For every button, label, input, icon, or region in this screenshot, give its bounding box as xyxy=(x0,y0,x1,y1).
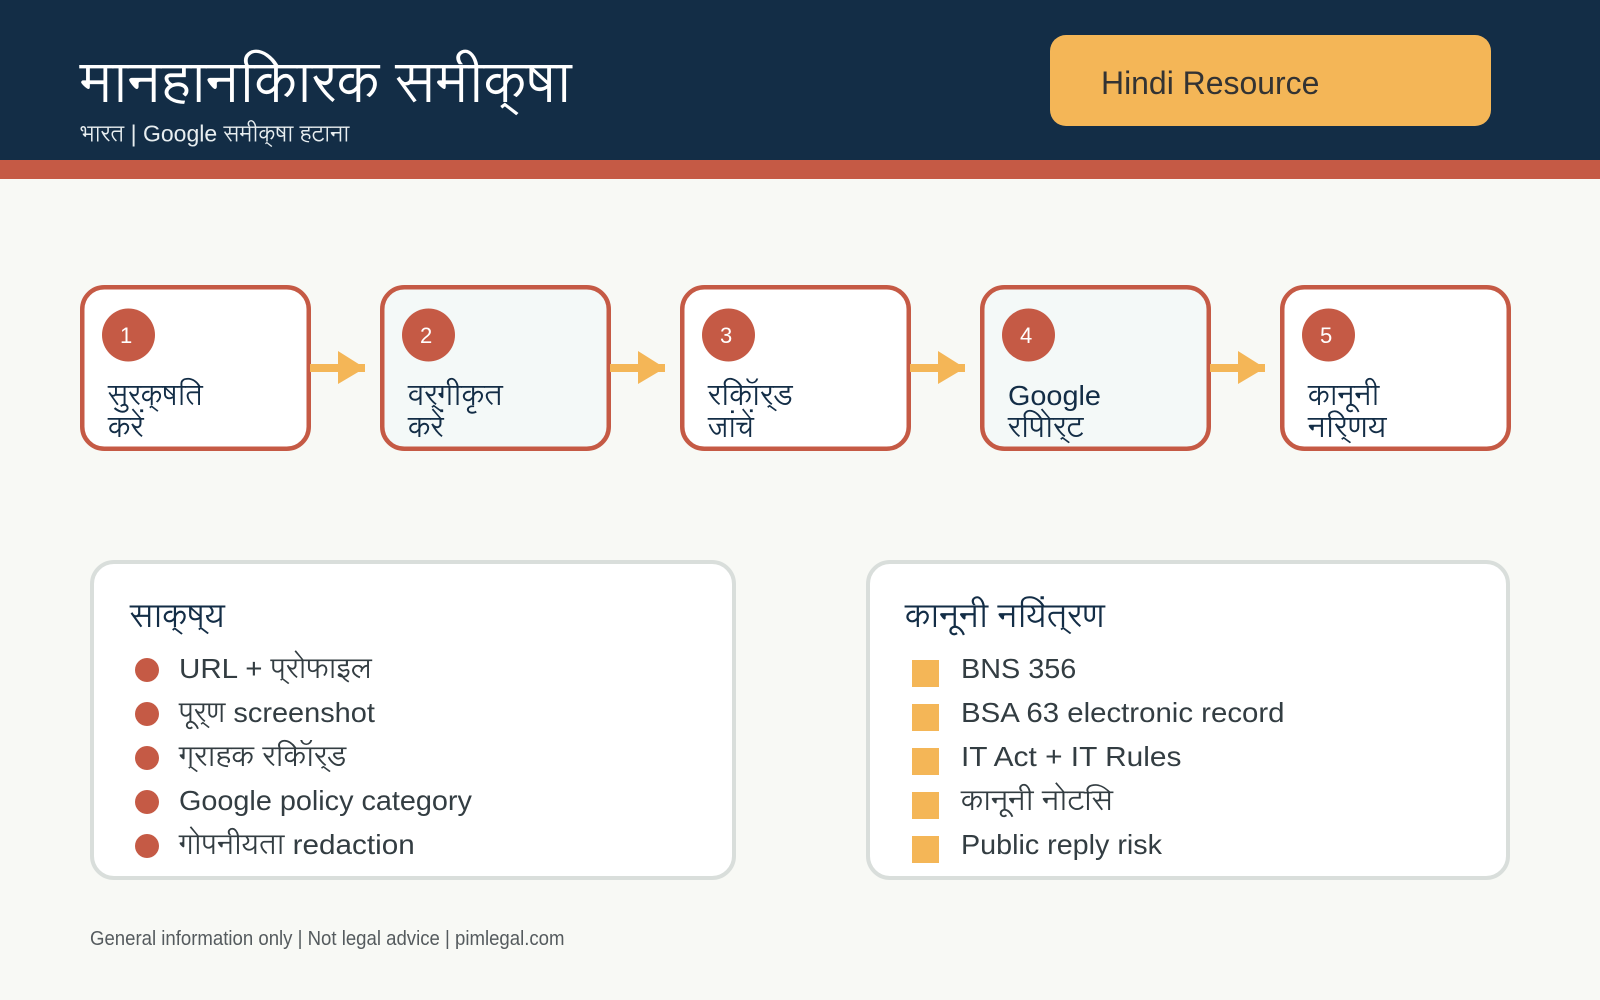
step 2 card: 2 xyxy=(420,323,432,348)
step 2 card: वर्‌गीकृत xyxy=(407,378,504,415)
evidence heading: साक्‌ष्‌य xyxy=(129,597,226,636)
step 3 card: 3 xyxy=(720,323,732,348)
step 1 card: करें xyxy=(107,408,144,444)
step 2 card: करें xyxy=(407,408,444,444)
evidence list: Google policy category xyxy=(179,785,472,816)
step 5 card xyxy=(1282,287,1509,449)
panel: legal control xyxy=(868,562,1508,878)
legal control list: IT Act + IT Rules xyxy=(961,741,1181,772)
evidence list: गोपनीयता redaction xyxy=(178,827,415,860)
step 3 card: जांचें xyxy=(707,408,755,444)
legal control list: BSA 63 electronic record xyxy=(961,697,1284,728)
badge: Hindi Resource xyxy=(1050,35,1491,126)
arrow 4 to 5 xyxy=(1210,351,1265,384)
step 2 card xyxy=(382,287,609,449)
step 4 card: रपिोर्‌ट xyxy=(1007,408,1085,444)
step 3 card: रकिॉर्‌ड xyxy=(707,377,794,412)
step 4 card xyxy=(982,287,1209,449)
subtitle: भारत | Google समीक्‌षा हटाना xyxy=(80,120,350,147)
evidence list: ग्‌राहक रकिॉर्‌ड xyxy=(178,740,347,772)
evidence list: पूर्‌ण screenshot xyxy=(178,697,375,729)
legal control heading: कानूनी नयिंत्‌रण xyxy=(904,595,1107,636)
evidence list xyxy=(135,651,472,860)
step 1 card xyxy=(82,287,309,449)
step 1 card: 1 xyxy=(120,323,132,348)
footer note: General information only | Not legal advice | pimlegal.com xyxy=(90,928,564,950)
panel: evidence xyxy=(92,562,734,878)
step 5 card: कानूनी xyxy=(1307,378,1380,413)
legal control list: Public reply risk xyxy=(961,829,1163,860)
step 3 card xyxy=(682,287,909,449)
evidence list: URL + प्‌रोफाइल xyxy=(179,651,373,684)
arrow 3 to 4 xyxy=(910,351,965,384)
arrow 1 to 2 xyxy=(310,351,365,384)
arrow 2 to 3 xyxy=(610,351,665,384)
step 4 card: 4 xyxy=(1020,323,1032,348)
badge: Hindi Resource: Hindi Resource xyxy=(1101,65,1319,101)
header band xyxy=(0,0,1600,179)
legal control list xyxy=(912,653,1284,863)
step 4 card: Google xyxy=(1008,380,1101,411)
title: मानहानकिारक समीक्‌षा xyxy=(79,49,573,116)
legal control list: BNS 356 xyxy=(961,653,1076,684)
step 5 card: 5 xyxy=(1320,323,1332,348)
step 1 card: सुरक्‌षति xyxy=(107,377,204,413)
step 5 card: नरि्‌णय xyxy=(1307,410,1388,444)
legal control list: कानूनी नोटसि xyxy=(960,783,1114,817)
